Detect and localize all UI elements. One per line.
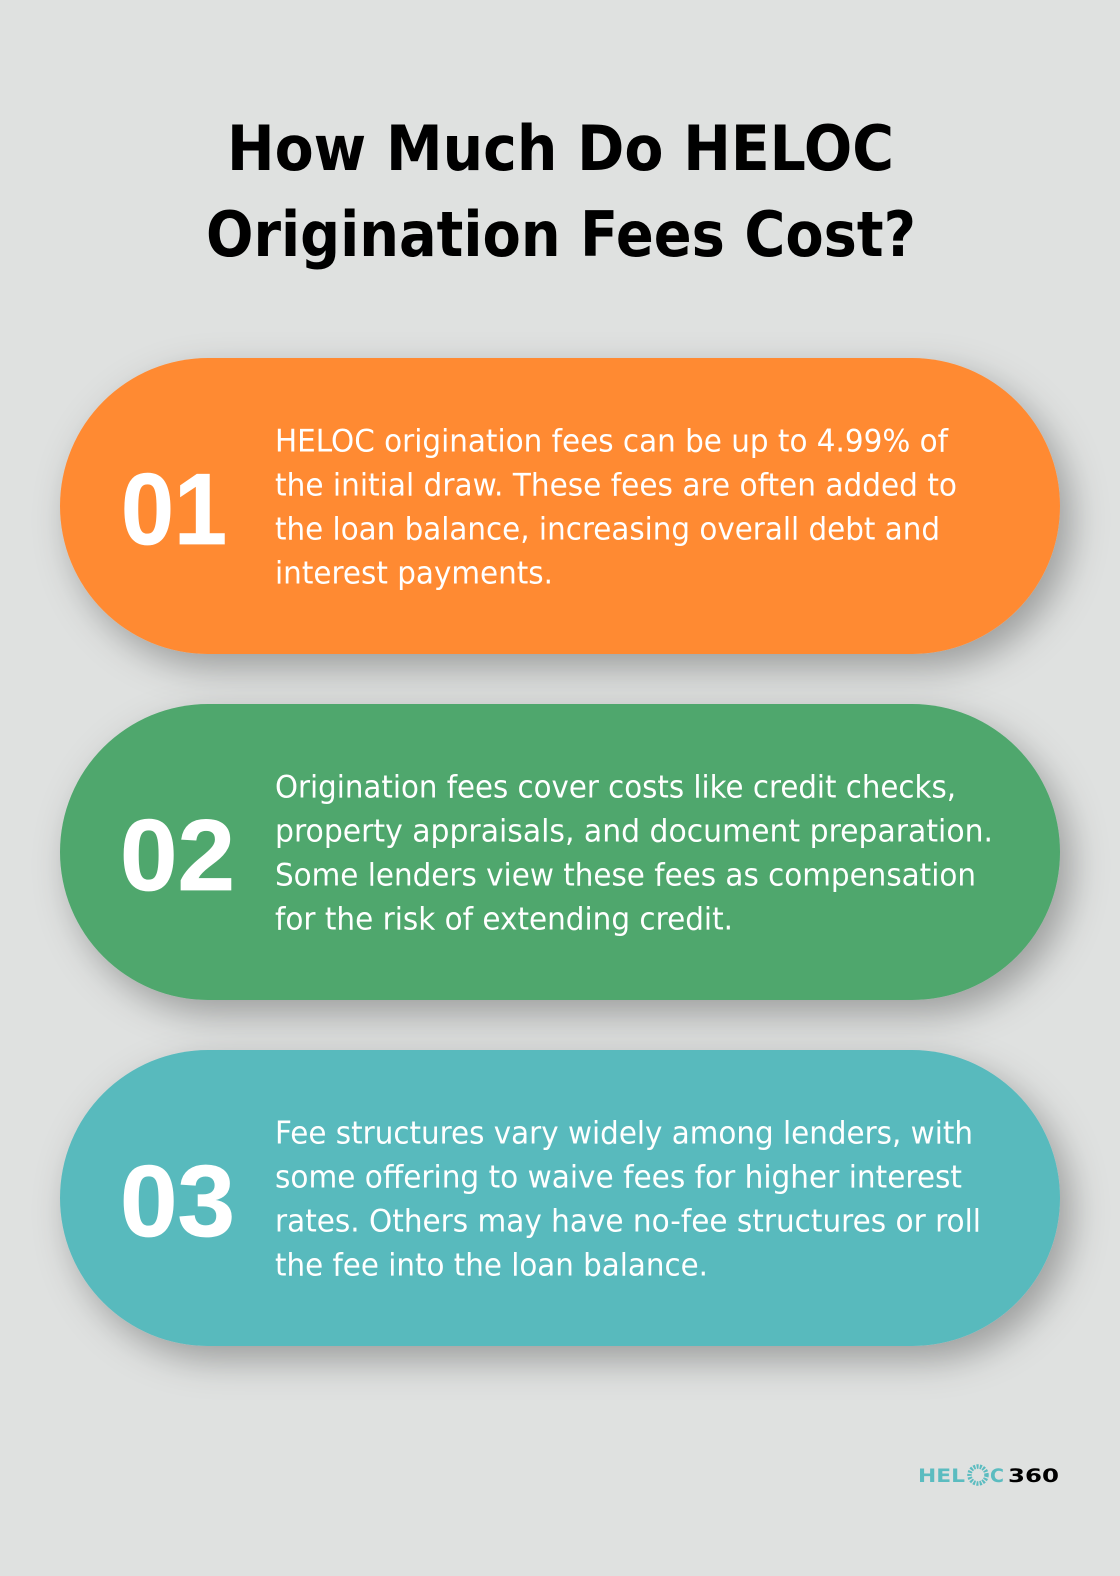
title: How Much Do HELOC: [227, 112, 894, 185]
pill: teal: [60, 1050, 1060, 1346]
pill: orange: [60, 358, 1060, 654]
text: step 03 description: Fee structures vary widely among lenders, with: [275, 1116, 973, 1152]
text: step 02 description: [275, 770, 993, 938]
panel: step 01: [60, 358, 1060, 654]
title: Origination Fees Cost?: [206, 198, 916, 271]
logo: HELOC360: HEL: [918, 1465, 965, 1487]
text: step 01 description: HELOC origination fees can be up to 4.99% of: [275, 424, 949, 460]
text: step 03 description: rates. Others may have no-fee structures or roll: [275, 1204, 981, 1240]
logo: HELOC360: 360: [1008, 1465, 1059, 1487]
logo: HELOC360: C: [990, 1465, 1004, 1487]
text: step 01 description: interest payments.: [275, 556, 553, 592]
logo: HELOC360: [918, 1465, 1059, 1487]
text: step 01 description: the loan balance, increasing overall debt and: [275, 512, 940, 548]
number 01: 01: [121, 454, 227, 566]
number 02: 02: [120, 800, 235, 912]
text: step 03 description: some offering to waive fees for higher interest: [275, 1160, 962, 1196]
text: step 02 description: for the risk of extending credit.: [275, 902, 733, 938]
text: step 03 description: the fee into the loan balance.: [275, 1248, 708, 1284]
panel: step 03: [60, 1050, 1060, 1346]
panel: step 02: [60, 704, 1060, 1000]
text: step 03 description: [275, 1116, 981, 1284]
text: step 02 description: property appraisals, and document preparation.: [275, 814, 993, 850]
pill: green: [60, 704, 1060, 1000]
text: step 01 description: [275, 424, 957, 592]
title: [206, 112, 916, 271]
number 03: 03: [120, 1146, 235, 1258]
text: step 01 description: the initial draw. These fees are often added to: [275, 468, 957, 504]
text: step 02 description: Origination fees cover costs like credit checks,: [275, 770, 956, 806]
text: step 02 description: Some lenders view these fees as compensation: [275, 858, 976, 894]
